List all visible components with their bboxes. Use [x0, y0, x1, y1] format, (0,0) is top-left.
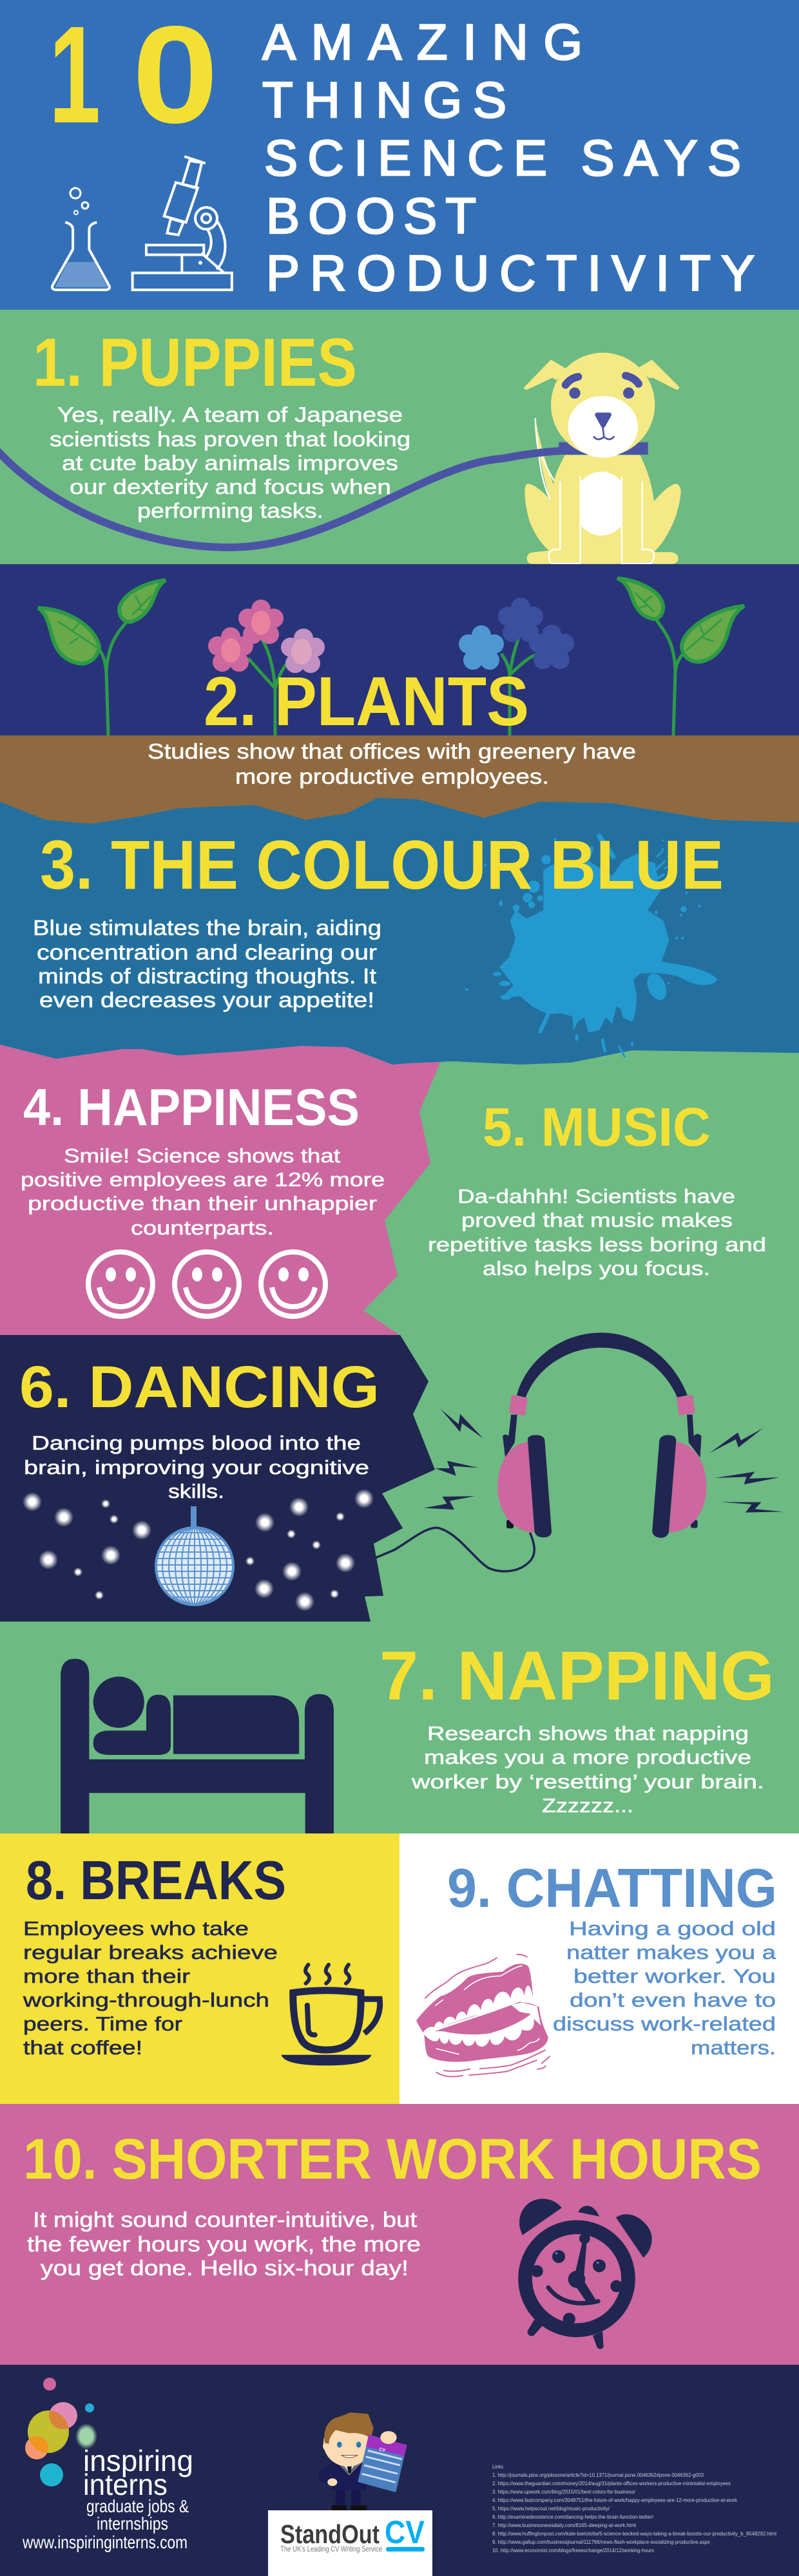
big number 10: 1: [49, 0, 101, 152]
panel: 1 puppies: [0, 310, 799, 565]
heading: 4. Happiness: 4. HAPPINESS: [23, 1079, 360, 1137]
big number 10: [49, 0, 218, 152]
napping text: [411, 1722, 764, 1817]
icon: right plant: [617, 578, 744, 735]
source links: [492, 2463, 776, 2553]
heading: 7. Napping: 7. NAPPING: [380, 1636, 775, 1714]
happiness text: Smile! Science shows that: [64, 1144, 340, 1167]
chatting text: Having a good old: [569, 1917, 776, 1940]
chatting text: don’t even have to: [570, 1989, 776, 2011]
inspiring interns logo text: interns: [83, 2468, 168, 2501]
source links: 4. https://www.fastcompany.com/3048751/the-future-of-work/happy-employees-are-12-more-productive-at-work: [492, 2497, 738, 2503]
source links: 1. http://journals.plos.org/plosone/article?id=10.1371/journal.pone.0046362#pone-0046362-g003: [492, 2472, 704, 2478]
icon: flask: [52, 188, 110, 290]
inspiring interns logo dots: [25, 2378, 97, 2486]
icon: chattering teeth: [416, 1955, 550, 2077]
leash: [0, 451, 561, 547]
heading: 8. Breaks: 8. BREAKS: [26, 1850, 286, 1911]
icon: cartoon character with CV: [319, 2412, 407, 2512]
icon: disco ball: [155, 1506, 235, 1605]
chatting text: matters.: [691, 2036, 776, 2059]
heading: 1. Puppies: 1. PUPPIES: [33, 325, 357, 401]
panel: 7 napping: [0, 1622, 799, 1834]
chatting text: better worker. You: [573, 1965, 776, 1987]
panel: 8 breaks: [0, 1833, 400, 2104]
source links: 3. https://www.upwork.com/blog/2015/01/best-colors-for-business/: [492, 2488, 636, 2495]
colour blue text: [33, 916, 381, 1012]
big number 10: 0: [132, 0, 218, 152]
dancing text: brain, improving your cognitive: [24, 1456, 369, 1479]
plants text: Studies show that offices with greenery have: [148, 739, 636, 763]
happiness text: productive than their unhappier: [28, 1192, 377, 1215]
breaks text: [23, 1917, 278, 2059]
icon: cartoon character with CV: CV: [379, 2447, 386, 2453]
source links: 9. http://www.gallup.com/businessjournal/111766/news-flash-workplace-socializing-productive.aspx: [492, 2539, 711, 2545]
colour blue text: minds of distracting thoughts. It: [38, 964, 376, 988]
chatting text: discuss work-related: [553, 2012, 776, 2035]
heading: 2. Plants: 2. PLANTS: [204, 662, 529, 740]
icon: alarm clock: [519, 2199, 652, 2349]
shorter hours text: It might sound counter-intuitive, but: [33, 2208, 417, 2231]
music text: [428, 1185, 766, 1280]
icon: paint splat: [465, 836, 717, 1057]
panel: 5 music: [0, 1030, 799, 1622]
title: SCIENCE SAYS: [264, 129, 741, 186]
shorter hours text: [27, 2208, 421, 2280]
happiness text: counterparts.: [131, 1217, 274, 1239]
puppies text: performing tasks.: [137, 499, 323, 522]
dancing text: Dancing pumps blood into the: [32, 1432, 361, 1454]
puppies text: at cute baby animals improves: [62, 451, 398, 475]
breaks text: peers. Time for: [23, 2012, 182, 2035]
plants text: more productive employees.: [235, 764, 549, 788]
panel: 6 dancing: [0, 1335, 435, 1622]
heading: 5. Music: 5. MUSIC: [483, 1097, 711, 1157]
heading: 10. Shorter Work Hours: 10. SHORTER WORK HOURS: [23, 2126, 762, 2191]
happiness text: [21, 1144, 385, 1239]
music text: proved that music makes: [461, 1209, 733, 1231]
colour blue text: even decreases your appetite!: [39, 988, 374, 1012]
shorter hours text: you get done. Hello six-hour day!: [41, 2256, 409, 2280]
icon: microscope: [133, 156, 232, 290]
panel: 9 chatting: [400, 1833, 799, 2104]
panel: 2 plants: [0, 564, 799, 824]
title: [262, 14, 755, 301]
title: BOOST: [266, 187, 476, 244]
title: THINGS: [262, 71, 506, 128]
colour blue text: Blue stimulates the brain, aiding: [33, 916, 381, 940]
inspiring interns logo text: www.inspiringinterns.com: [22, 2532, 188, 2552]
puppy tail: [535, 418, 556, 500]
breaks text: Employees who take: [23, 1917, 249, 1940]
dancing text: skills.: [168, 1480, 224, 1502]
music text: Da-dahhh! Scientists have: [457, 1185, 735, 1208]
icon: bed with sleeper: [61, 1659, 334, 1833]
breaks text: that coffee!: [23, 2036, 142, 2059]
napping text: Zzzzzz...: [542, 1794, 633, 1817]
panel: header: [0, 0, 799, 310]
source links: 5. https://www.helpscout.net/blog/music-productivity/: [492, 2505, 610, 2512]
colour blue text: concentration and clearing our: [37, 940, 377, 964]
napping text: worker by ‘resetting’ your brain.: [411, 1770, 764, 1793]
heading: 9. Chatting: 9. CHATTING: [447, 1858, 777, 1919]
source links: 6. http://examinedexistence.com/dancing-helps-the-brain-function-better/: [492, 2514, 654, 2520]
breaks text: regular breaks achieve: [23, 1941, 278, 1964]
music text: repetitive tasks less boring and: [428, 1233, 766, 1256]
title: AMAZING: [262, 14, 582, 70]
heading: 6. Dancing: 6. DANCING: [19, 1354, 380, 1420]
music text: also helps you focus.: [483, 1257, 710, 1280]
puppies text: Yes, really. A team of Japanese: [57, 403, 403, 426]
shorter hours text: the fewer hours you work, the more: [27, 2232, 421, 2256]
standout cv logo: CV: [385, 2514, 425, 2550]
source links: 2. https://www.theguardian.com/money/2014/aug/31/plants-offices-workers-productive-minimalist-employees: [492, 2480, 731, 2486]
heading: 3. The Colour Blue: 3. THE COLOUR BLUE: [40, 826, 724, 904]
icon: left plant: [38, 580, 166, 735]
inspiring interns logo text: inspiring: [83, 2444, 193, 2477]
napping text: makes you a more productive: [424, 1746, 751, 1768]
source links: Links: [492, 2463, 503, 2470]
icon: headphones: [374, 1332, 783, 1571]
inspiring interns logo text: internships: [97, 2514, 168, 2533]
chatting text: [553, 1917, 776, 2059]
inspiring interns logo text: graduate jobs &: [86, 2496, 189, 2516]
plants text: [148, 739, 636, 788]
standout cv logo: [268, 2510, 432, 2576]
source links: 8. http://www.huffingtonpost.com/kate-bartolotta/5-science-backed-ways-taking-a-break-boosts-our-productivity_b_8548292.html: [492, 2530, 776, 2537]
source links: 7. http://www.businessnewsdaily.com/8165-sleeping-at-work.html: [492, 2522, 636, 2528]
icon: smiley faces: [88, 1252, 325, 1316]
breaks text: working-through-lunch: [23, 1989, 269, 2011]
panel: footer: [23, 2378, 776, 2576]
inspiring interns logo text: [22, 2444, 193, 2552]
chatting text: natter makes you a: [566, 1941, 776, 1964]
icon: coffee cup: [282, 1965, 380, 2065]
puppies text: scientists has proven that looking: [50, 428, 410, 451]
breaks text: more than their: [23, 1965, 190, 1987]
dancing text: [24, 1432, 369, 1502]
icon: pink flowers: [208, 600, 325, 735]
disco lights: [23, 1489, 374, 1611]
title: PRODUCTIVITY: [266, 245, 755, 301]
happiness text: positive employees are 12% more: [21, 1168, 385, 1191]
icon: blue flowers: [459, 598, 574, 735]
standout cv logo: The UK's Leading CV Writing Service: [280, 2544, 382, 2553]
panel: 4 happiness: [0, 1030, 454, 1335]
napping text: Research shows that napping: [427, 1722, 749, 1745]
puppies text: our dexterity and focus when: [70, 475, 391, 498]
standout cv logo: StandOut: [280, 2519, 380, 2549]
panel: 10 shorter work hours: [0, 2104, 799, 2365]
icon: puppy: [524, 353, 681, 564]
puppies text: [50, 403, 410, 522]
panel: 3 the colour blue: [0, 773, 799, 1065]
source links: 10. http://www.economist.com/blogs/freeexchange/2014/12/working-hours: [492, 2547, 654, 2553]
